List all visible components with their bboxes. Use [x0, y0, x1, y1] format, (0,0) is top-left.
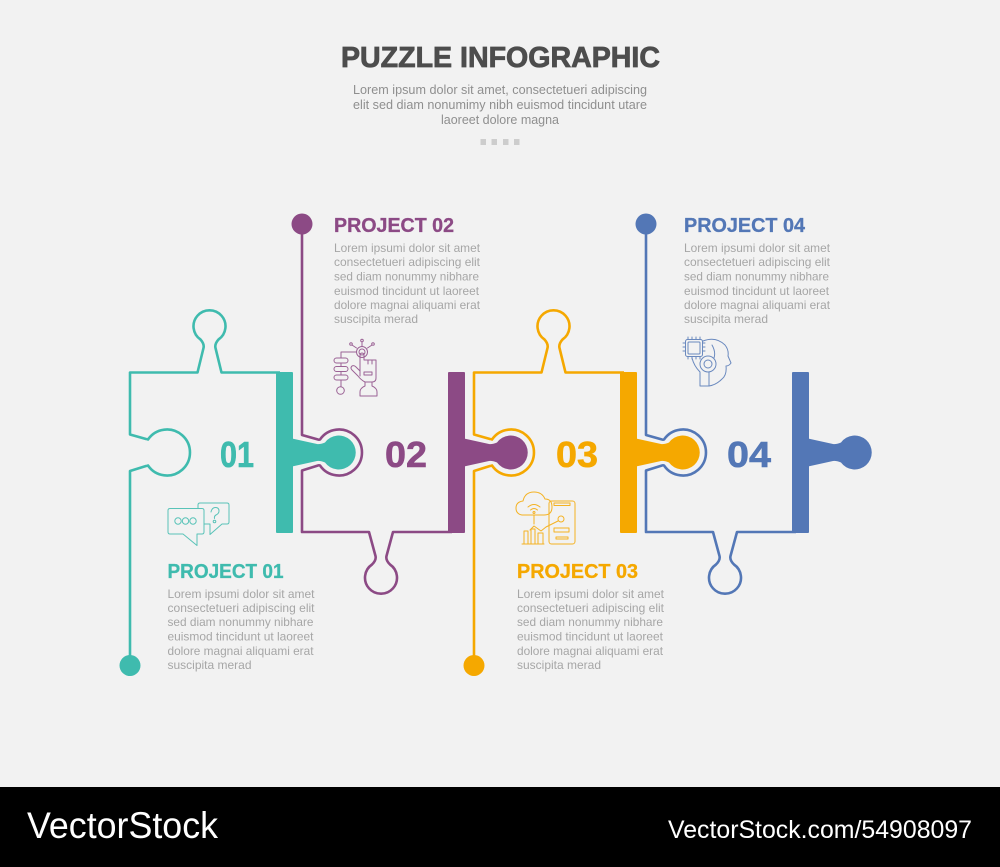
body: project 01: suscipita merad: [168, 658, 252, 672]
body: project 02: consectetueri adipiscing elit: [334, 255, 481, 269]
body: project 04: consectetueri adipiscing elit: [684, 255, 831, 269]
body: project 01: Lorem ipsumi dolor sit amet: [168, 587, 315, 601]
heading: project 01: PROJECT 01: [168, 561, 284, 583]
icon: chat bubbles: [168, 503, 229, 546]
body: project 01: consectetueri adipiscing elit: [168, 601, 315, 615]
footer url: VectorStock.com/54908097: [668, 816, 972, 844]
icon: robot hand: [334, 339, 377, 396]
body: project 03: consectetueri adipiscing elit: [517, 601, 665, 615]
icon: cloud and phone: [516, 492, 575, 544]
heading: project 03: PROJECT 03: [517, 561, 638, 583]
body: project 01: euismod tincidunt ut laoreet: [168, 630, 314, 644]
body: project 04: Lorem ipsumi dolor sit amet: [684, 241, 831, 255]
body: project 01: sed diam nonummy nibhare: [168, 615, 314, 629]
subtitle: Lorem ipsum dolor sit amet, consectetueri adipiscing: [353, 83, 647, 97]
number 04: 04: [727, 434, 771, 475]
heading: project 04: PROJECT 04: [684, 215, 806, 237]
body: project 03: Lorem ipsumi dolor sit amet: [517, 587, 665, 601]
subtitle: elit sed diam nonumimy nibh euismod tincidunt utare: [353, 98, 647, 112]
footer bar: [0, 787, 1000, 867]
puzzle piece 3 outline: [464, 310, 624, 676]
body: project 04: sed diam nonummy nibhare: [684, 270, 829, 284]
body: project 02: sed diam nonummy nibhare: [334, 270, 479, 284]
text block: project 02: [334, 215, 481, 326]
body: project 02: Lorem ipsumi dolor sit amet: [334, 241, 481, 255]
connector bar 2: [448, 372, 528, 533]
heading: project 02: PROJECT 02: [334, 215, 454, 237]
separator dots: [480, 139, 520, 145]
body: project 02: euismod tincidunt ut laoreet: [334, 284, 480, 298]
subtitle: [353, 83, 647, 127]
number 02: 02: [385, 434, 427, 475]
body: project 04: euismod tincidunt ut laoreet: [684, 284, 830, 298]
connector bar 4: [792, 372, 872, 533]
body: project 01: dolore magnai aliquami erat: [168, 644, 314, 658]
connector bar 1: [276, 372, 356, 533]
text block: project 04: [684, 215, 831, 326]
body: project 04: dolore magnai aliquami erat: [684, 298, 831, 312]
puzzle piece 1 outline: [120, 310, 280, 676]
puzzle piece 2 outline: [292, 214, 452, 594]
body: project 02: [334, 241, 481, 326]
footer logo: VectorStock: [27, 805, 218, 846]
body: project 04: [684, 241, 831, 326]
body: project 01: [168, 587, 315, 672]
number 01: 01: [220, 434, 254, 475]
number 03: 03: [556, 434, 598, 475]
body: project 02: suscipita merad: [334, 312, 418, 326]
body: project 02: dolore magnai aliquami erat: [334, 298, 481, 312]
body: project 03: dolore magnai aliquami erat: [517, 644, 664, 658]
body: project 03: [517, 587, 665, 672]
connector bar 3: [620, 372, 700, 533]
title: PUZZLE INFOGRAPHIC: [341, 42, 660, 74]
body: project 03: euismod tincidunt ut laoreet: [517, 630, 664, 644]
text block: project 03: [517, 561, 665, 672]
subtitle: laoreet dolore magna: [441, 113, 559, 127]
body: project 03: sed diam nonummy nibhare: [517, 615, 663, 629]
body: project 04: suscipita merad: [684, 312, 768, 326]
puzzle piece 4 outline: [636, 214, 796, 594]
text block: project 01: [168, 561, 315, 672]
body: project 03: suscipita merad: [517, 658, 601, 672]
icon: AI head: [683, 337, 731, 386]
header block: [341, 42, 660, 145]
